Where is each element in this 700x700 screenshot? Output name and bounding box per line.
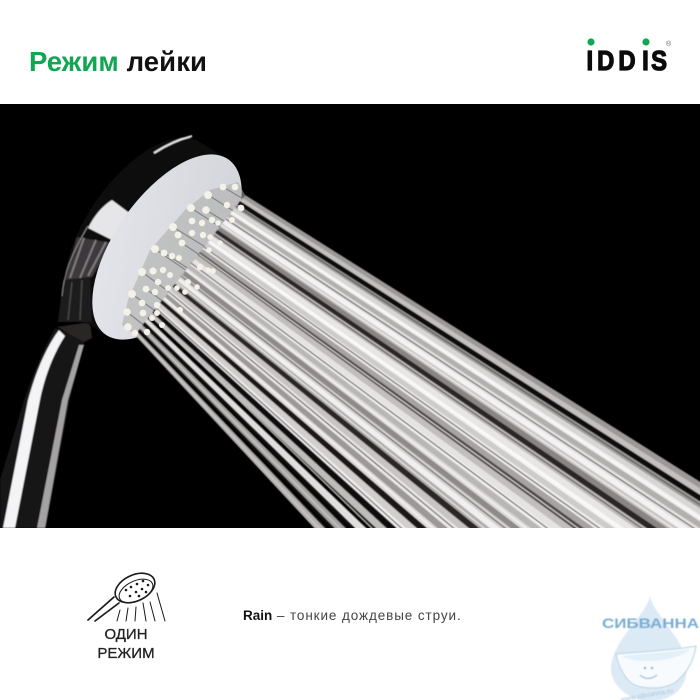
watermark: Sibvanna: СИБВАННА [602,615,699,631]
icon: one-mode shower head [87,572,166,622]
description text: Rain – тонкие дождевые струи. [243,608,462,623]
title: Режим лейки [29,46,207,77]
icon label: РЕЖИМ [97,645,155,662]
logo: iDDiS: IDDIS [587,44,667,76]
logo: iDDiS: ® [666,40,672,48]
icon label [97,626,155,662]
panel: shower photo [0,104,700,528]
icon label: ОДИН [104,626,148,643]
water streams [135,195,700,560]
spray nozzles [123,184,244,336]
shower head body [35,113,243,347]
shower handle [0,322,92,528]
nozzle zone shading [122,182,245,335]
spray head face [63,130,271,364]
watermark: Sibvanna [602,596,699,700]
